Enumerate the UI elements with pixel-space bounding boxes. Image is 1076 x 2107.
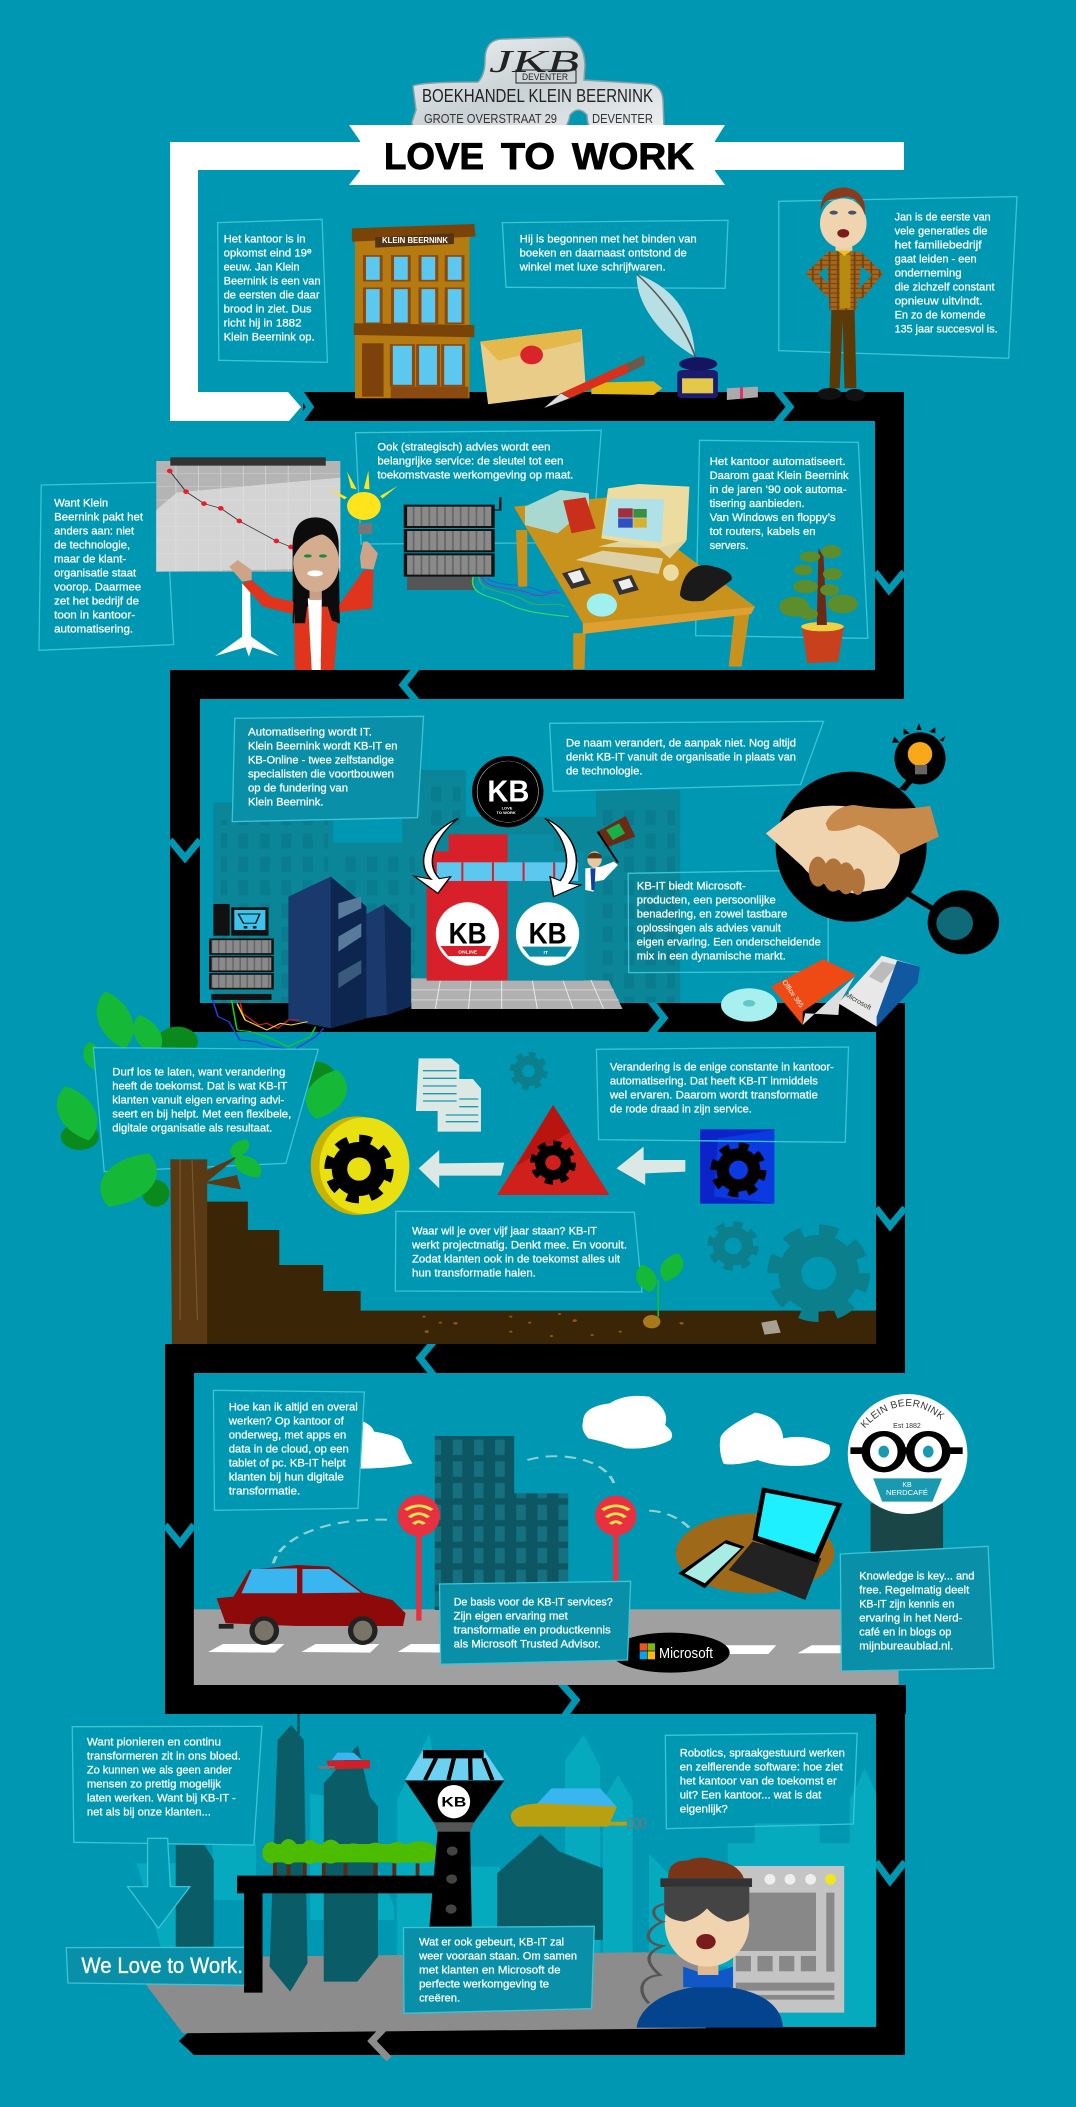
- text: automatisering wordt IT: Automatisering wordt IT.: [248, 726, 372, 738]
- gears in background: [512, 1055, 863, 1315]
- arrow down: [128, 1838, 190, 1928]
- text: automatisering wordt IT: KB-Online - twee zelfstandige: [248, 754, 394, 766]
- icon: software boxes and cd: [721, 956, 920, 1027]
- text box: durf los te laten: [93, 1048, 318, 1172]
- character: small man with flag: [585, 816, 635, 892]
- text: want klein beernink: Beernink pakt het: [54, 511, 143, 523]
- badge: KB Online: KB: [449, 917, 487, 950]
- text box outlines panel 1: [218, 197, 1017, 362]
- text: ook strategisch advies: toekomstvaste werkomgeving op maat.: [377, 469, 573, 481]
- text: het kantoor automatiseert: [710, 456, 849, 552]
- text: hij is begonnen: winkel met luxe schrijfwaren.: [519, 261, 666, 273]
- text: knowledge is key: KB-IT zijn kennis en: [859, 1598, 954, 1610]
- light teal skyline: [137, 1733, 876, 2027]
- black winding route: [165, 388, 906, 2059]
- text: hij is begonnen: Hij is begonnen met het binden van: [520, 233, 697, 245]
- icon: control panel machine: [733, 1866, 844, 2013]
- clouds: [361, 1396, 830, 1469]
- text box: want pionieren: [72, 1726, 262, 1845]
- title banner: Love to Work: WORK: [572, 136, 694, 177]
- text: het kantoor is in opkomst: Beernink is een van: [224, 275, 321, 287]
- product box labels: Microsoft: [844, 992, 872, 1012]
- text: hoe kan ik altijd: data in de cloud, op een: [229, 1443, 349, 1455]
- text: hoe kan ik altijd: [228, 1401, 358, 1497]
- soil speckles: [422, 1313, 684, 1337]
- badge: KB IT: IT: [543, 950, 548, 956]
- text: jan is de eerste: vele generaties die: [895, 225, 988, 237]
- text: hoe kan ik altijd: werken? Op kantoor of: [228, 1415, 345, 1427]
- icon: laptop and phone: [676, 1487, 842, 1600]
- logo plate: Boekhandel Klein Beernink: DEVENTER: [592, 111, 653, 126]
- text: het kantoor automatiseert: Daarom gaat Klein Beernink: [710, 470, 849, 482]
- text box: knowledge: [840, 1546, 994, 1671]
- text: want pionieren: mensen zo prettig mogelijk: [87, 1778, 221, 1790]
- title banner: Love to Work: TO: [501, 136, 555, 177]
- text: want klein beernink: organisatie staat: [54, 567, 136, 579]
- icon: feather and ink bottle: [637, 274, 718, 398]
- text: durf los te laten: digitale organisatie als resultaat.: [112, 1122, 272, 1134]
- flying car red: [318, 1753, 370, 1769]
- text: want klein beernink: voorop. Daarmee: [54, 581, 141, 593]
- Microsoft label: Microsoft: [659, 1645, 714, 1662]
- text: ook strategisch advies: Ook (strategisch) advies wordt een: [377, 441, 550, 453]
- tree: [85, 1137, 269, 1344]
- badge: KB love to work: KB: [487, 774, 529, 809]
- icon: Microsoft blob: [611, 1633, 730, 1673]
- icon: envelope with wax seal: [480, 329, 586, 404]
- icon: seedling: [632, 1251, 688, 1328]
- panel 6: future city illustrations: [66, 1714, 876, 2033]
- text: automatisering wordt IT: [248, 726, 398, 808]
- city skyline: [213, 770, 680, 1003]
- text: ook strategisch advies: belangrijke service: de sleutel tot een: [377, 455, 563, 467]
- text: wat er ook gebeurt: [418, 1936, 577, 2004]
- text: want klein beernink: automatisering.: [54, 623, 133, 635]
- text: jan is de eerste: En zo de komende: [895, 309, 986, 321]
- text: knowledge is key: café en in blogs op: [859, 1626, 951, 1638]
- floor: [145, 1952, 706, 2033]
- text: het kantoor is in opkomst: e: [307, 246, 312, 255]
- text: want pionieren: Zo kunnen we als geen ander: [87, 1764, 232, 1776]
- panel 4: transformation illustrations: [47, 989, 876, 1344]
- cables: [473, 577, 569, 617]
- text box outline: robotics: [665, 1733, 857, 1829]
- panel 1: shop history illustrations: [218, 187, 1017, 408]
- character: woman presenting: [229, 517, 378, 670]
- nerdcafe badge text: NERDCAFÉ: [886, 1488, 928, 1497]
- text: de naam verandert: denkt KB-IT vanuit de organisatie in plaats van: [566, 751, 796, 763]
- badge: KB Online: [436, 902, 499, 966]
- text: het kantoor is in opkomst: opkomst eind 19: [224, 247, 304, 259]
- text: het kantoor is in opkomst: richt hij in 1882: [224, 317, 302, 329]
- text box outline: KB-IT biedt: [628, 870, 828, 973]
- wifi pole 1: [398, 1495, 440, 1621]
- text: verandering is de enige constante: Verandering is de enige constante in kantoor-: [610, 1061, 834, 1073]
- text: wat er ook gebeurt: creëren.: [419, 1992, 460, 2004]
- product box labels: [780, 979, 872, 1012]
- text: de naam verandert: [566, 737, 796, 777]
- text: durf los te laten: [112, 1066, 291, 1134]
- text: de basis voor de KB-IT services: Zijn eigen ervaring met: [454, 1610, 568, 1622]
- text: automatisering wordt IT: Klein Beernink wordt KB-IT en: [248, 740, 398, 752]
- text: waar wil je over vijf jaar staan: Zodat klanten ook in de toekomst alles uit: [412, 1253, 620, 1265]
- white start of route: [170, 142, 904, 421]
- text: KB-IT biedt Microsoft: [637, 880, 821, 962]
- text: want klein beernink: toon in kantoor-: [54, 609, 135, 621]
- text: waar wil je over vijf jaar staan: [411, 1225, 627, 1279]
- text box outline: de naam: [550, 721, 824, 791]
- text: jan is de eerste: opnieuw uitvindt.: [895, 295, 983, 307]
- text: jan is de eerste: onderneming: [895, 267, 962, 279]
- text: KB-IT biedt Microsoft: KB-IT biedt Microsoft-: [637, 880, 746, 892]
- text: want klein beernink: [54, 497, 143, 635]
- icon: office building: [352, 224, 476, 398]
- arrow left: [419, 1150, 504, 1188]
- badge: KB Online: ONLINE: [458, 949, 478, 955]
- logo plate: Boekhandel Klein Beernink: DEVENTER: [522, 72, 568, 82]
- text: het kantoor is in opkomst: de eersten die daar: [224, 289, 320, 301]
- panel 2: automation illustrations: [39, 430, 868, 670]
- text: het kantoor automatiseert: in de jaren ‘90 ook automa-: [710, 484, 847, 496]
- icon: light bulb: [329, 471, 398, 534]
- text: robotics: het kantoor van de toekomst er: [680, 1775, 837, 1787]
- text: jan is de eerste: [895, 211, 998, 335]
- logo plate: Boekhandel Klein Beernink: GROTE OVERSTRAAT 29: [424, 111, 557, 126]
- text: het kantoor is in opkomst: [224, 233, 321, 343]
- badge: KB IT: KB: [529, 917, 567, 950]
- arrows into store: [414, 818, 581, 897]
- wifi route dashes: [273, 1456, 698, 1563]
- text: want klein beernink: zet het bedrijf de: [54, 595, 139, 607]
- title banner: Love to Work: LOVE: [384, 136, 484, 177]
- ground and steps: [172, 1202, 876, 1344]
- text: het kantoor is in opkomst: Het kantoor is in: [224, 233, 306, 245]
- text: KB-IT biedt Microsoft: eigen ervaring. Een onderscheidende: [637, 936, 821, 948]
- icon: server rack: [405, 497, 500, 590]
- tree leaves behind: [47, 989, 356, 1150]
- title banner: Love to Work: [349, 125, 725, 185]
- text: want pionieren: [87, 1736, 241, 1818]
- text: het kantoor automatiseert: tot routers, kabels en: [710, 526, 816, 538]
- text: hoe kan ik altijd: onderweg, met apps en: [229, 1429, 346, 1441]
- text: verandering is de enige constante: automatisering. Dat heeft KB-IT inmiddels: [610, 1075, 818, 1087]
- icon: documents: [416, 1058, 481, 1132]
- badge: KB IT: [516, 902, 579, 966]
- text: want klein beernink: anders aan: niet: [54, 525, 134, 537]
- nerdcafe badge text: [860, 1399, 945, 1497]
- text: robotics: [680, 1747, 845, 1815]
- text: automatisering wordt IT: specialisten die voortbouwen: [248, 768, 394, 780]
- logo plate: Boekhandel Klein Beernink: [412, 37, 664, 131]
- nerdcafe badge text: KLEIN BEERNINK: [860, 1399, 945, 1428]
- logo plate: Boekhandel Klein Beernink: JKB: [489, 43, 579, 79]
- text box: automatisering: [232, 716, 424, 822]
- icon: eraser: [727, 387, 758, 400]
- text: want pionieren: net als bij onze klanten...: [87, 1806, 211, 1818]
- text: durf los te laten: Durf los te laten, want verandering: [112, 1066, 285, 1078]
- text: jan is de eerste: het familiebedrijf: [895, 239, 983, 251]
- icon: floppy on ground: [761, 1320, 781, 1335]
- text: durf los te laten: klanten vanuit eigen ervaring advi-: [112, 1094, 285, 1106]
- text: want klein beernink: de technologie,: [54, 539, 130, 551]
- text: we love to work: We Love to Work.: [81, 1953, 243, 1978]
- icon: small server rack: [210, 939, 273, 1000]
- text box outlines panel 4: [395, 1047, 849, 1292]
- text box: we love to work: [66, 1947, 256, 1985]
- icon: KB store: [427, 834, 584, 981]
- text box outlines panel 2: [39, 430, 868, 650]
- text: de naam verandert: De naam verandert, de aanpak niet. Nog altijd: [566, 737, 796, 749]
- text: het kantoor automatiseert: servers.: [710, 540, 749, 552]
- cables continuing: [213, 1000, 324, 1050]
- text: durf los te laten: heeft de toekomst. Dat is wat KB-IT: [112, 1080, 288, 1092]
- icon: yellow gear disc: [311, 1116, 409, 1215]
- text: robotics: eigenlijk?: [680, 1803, 728, 1815]
- flying car yellow: [511, 1788, 646, 1829]
- text: KB-IT biedt Microsoft: producten, een persoonlijke: [637, 894, 776, 906]
- text: waar wil je over vijf jaar staan: Waar wil je over vijf jaar staan? KB-IT: [412, 1225, 597, 1237]
- sign text in building: KLEIN BEERNINK: [382, 236, 448, 245]
- icon: potted plant: [779, 545, 858, 663]
- text: want pionieren: transformeren zit in ons bloed.: [87, 1750, 241, 1762]
- badge: KB Nerdcafe: [848, 1394, 967, 1553]
- logo plate: Boekhandel Klein Beernink: BOEKHANDEL KLEIN BEERNINK: [422, 86, 653, 106]
- text: want pionieren: laten werken. Want bij KB-IT -: [87, 1792, 236, 1804]
- text: het kantoor is in opkomst: eeuw. Jan Klein: [224, 261, 300, 273]
- text: de basis voor de KB-IT services: De basis voor de KB-IT services?: [454, 1596, 613, 1608]
- character: man with VR headset: [637, 1858, 783, 2028]
- text: hij is begonnen: boeken en daarnaast ontstond de: [520, 247, 687, 259]
- elevated platform with trees: [237, 1839, 438, 1993]
- text: KB-IT biedt Microsoft: benadering, en zowel tastbare: [637, 908, 787, 920]
- product box labels: Office 365: [780, 979, 804, 1009]
- text: want klein beernink: maar de klant-: [54, 553, 126, 565]
- text: verandering is de enige constante: [609, 1061, 834, 1115]
- icon: fountain pen and pencil: [544, 355, 662, 408]
- text: robotics: uit? Een kantoor... wat is dat: [680, 1789, 821, 1801]
- text: hoe kan ik altijd: tablet of pc. KB-IT helpt: [229, 1457, 346, 1469]
- text: KB-IT biedt Microsoft: mix in een dynamische markt.: [637, 950, 786, 962]
- panel 5: anywhere working illustrations: [194, 1390, 994, 1685]
- nerdcafe badge text: KB: [902, 1482, 912, 1489]
- text: jan is de eerste: Jan is de eerste van: [895, 211, 991, 223]
- character: Jan Klein Beernink: [806, 187, 883, 401]
- text: waar wil je over vijf jaar staan: werkt projectmatig. Denkt mee. En vooruit.: [411, 1239, 627, 1251]
- wifi pole 2: [595, 1496, 636, 1583]
- icon: pavement: [411, 978, 623, 1009]
- text: verandering is de enige constante: de rode draad in zijn service.: [610, 1103, 752, 1115]
- text: het kantoor automatiseert: Van Windows en floppy’s: [710, 512, 836, 524]
- text: knowledge is key: [859, 1570, 974, 1652]
- badge: KB love to work: TO WORK: [497, 810, 516, 815]
- icon: desk with computer: [514, 484, 755, 669]
- text: want klein beernink: Want Klein: [54, 497, 108, 509]
- text: jan is de eerste: 135 jaar succesvol is.: [895, 323, 998, 335]
- text: jan is de eerste: die zichzelf constant: [895, 281, 995, 293]
- text: hoe kan ik altijd: klanten bij hun digitale: [229, 1471, 344, 1483]
- road: [194, 1609, 899, 1685]
- tower with KB badge: KB: [441, 1794, 466, 1810]
- text: want pionieren: Want pionieren en continu: [87, 1736, 221, 1748]
- text: knowledge is key: ervaring in het Nerd-: [859, 1612, 963, 1624]
- text: de basis voor de KB-IT services: [454, 1596, 613, 1650]
- text: hoe kan ik altijd: Hoe kan ik altijd en overal: [229, 1401, 358, 1413]
- text: automatisering wordt IT: op de fundering van: [248, 782, 348, 794]
- text: wat er ook gebeurt: met klanten en Microsoft de: [419, 1964, 561, 1976]
- badge: KB love to work: [472, 756, 543, 827]
- text: durf los te laten: seert en bij helpt. Met een flexibele,: [112, 1108, 291, 1120]
- text box: wat er ook gebeurt: [403, 1926, 594, 2013]
- skyline windows: [221, 780, 675, 1003]
- text: robotics: en zelflerende software: hoe ziet: [680, 1761, 843, 1773]
- text: ook strategisch advies: [377, 441, 573, 481]
- arrow left: [616, 1147, 685, 1185]
- text: wat er ook gebeurt: Wat er ook gebeurt, KB-IT zal: [419, 1936, 564, 1948]
- text: hij is begonnen: [519, 233, 697, 273]
- buildings: [435, 1436, 568, 1610]
- text: knowledge is key: free. Regelmatig deelt: [859, 1584, 969, 1596]
- icon: computer with shopping cart: [213, 904, 268, 936]
- chart on easel: [156, 457, 340, 657]
- text box outline: hoe kan ik: [213, 1390, 364, 1510]
- text: het kantoor is in opkomst: brood in ziet. Dus: [224, 303, 312, 315]
- text: wat er ook gebeurt: perfecte werkomgeving te: [419, 1978, 549, 1990]
- text: knowledge is key: mijnbureaublad.nl.: [859, 1640, 953, 1652]
- icon: handshake circle: [766, 723, 999, 954]
- text: het kantoor automatiseert: Het kantoor automatiseert.: [710, 456, 846, 468]
- icon: large server towers: [288, 877, 411, 1028]
- text: de basis voor de KB-IT services: als Microsoft Trusted Advisor.: [454, 1638, 601, 1650]
- icon: red gear triangle: [497, 1105, 609, 1195]
- text box: basis: [440, 1581, 631, 1664]
- text: het kantoor is in opkomst: Klein Beernink op.: [224, 331, 315, 343]
- text: verandering is de enige constante: wel ervaren. Daarom wordt transformatie: [609, 1089, 818, 1101]
- panel 3: KB-IT illustrations: [210, 716, 999, 1028]
- text: de naam verandert: de technologie.: [566, 765, 642, 777]
- text: robotics: Robotics, spraakgestuurd werken: [680, 1747, 845, 1759]
- text: hoe kan ik altijd: transformatie.: [229, 1485, 300, 1497]
- badge: KB love to work: LOVE: [502, 805, 513, 810]
- car: [217, 1565, 406, 1645]
- text: knowledge is key: Knowledge is key... and: [859, 1570, 974, 1582]
- tower with KB badge: [405, 1750, 504, 1927]
- text: jan is de eerste: gaat leiden - een: [895, 253, 977, 265]
- text: wat er ook gebeurt: weer vooraan staan. Om samen: [418, 1950, 577, 1962]
- text: het kantoor automatiseert: tisering aanbieden.: [710, 498, 805, 510]
- text: de basis voor de KB-IT services: transformatie en productkennis: [454, 1624, 611, 1636]
- nerdcafe badge text: Est 1882: [893, 1423, 921, 1430]
- dark towers: [176, 1714, 603, 1992]
- text: automatisering wordt IT: Klein Beernink.: [248, 796, 324, 808]
- text: waar wil je over vijf jaar staan: hun transformatie halen.: [412, 1267, 536, 1279]
- text: KB-IT biedt Microsoft: oplossingen als advies vanuit: [637, 922, 781, 934]
- icon: blue gear square: [700, 1129, 774, 1204]
